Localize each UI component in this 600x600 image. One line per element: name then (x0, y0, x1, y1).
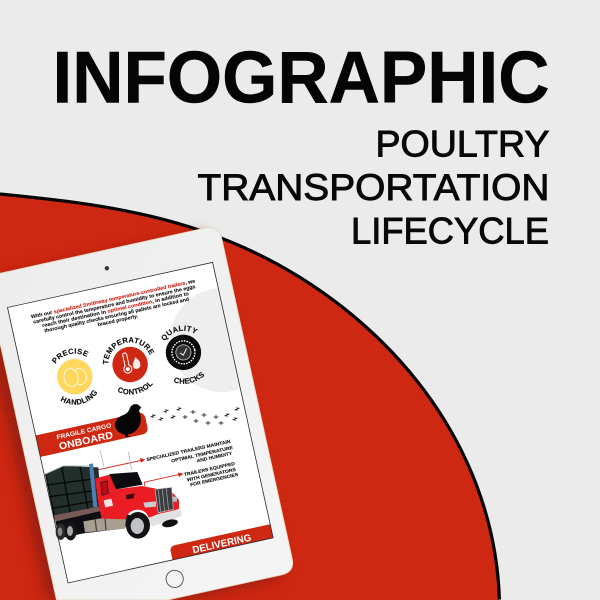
icon: bird tracks (150, 407, 240, 425)
badge: temperature control: CONTROL (118, 382, 153, 395)
banner: fragile cargo onboard: ONBOARD (58, 430, 114, 453)
tablet shadow (0, 234, 283, 600)
badge: quality checks: CHECKS (174, 372, 204, 384)
grey decorative circle (170, 288, 240, 392)
intro paragraph: thorough quality checks ensuring all pallets are locked and (44, 297, 190, 334)
badge: temperature control: TEMPERATURE (102, 337, 154, 364)
intro paragraph: braced properly. (97, 313, 139, 328)
far wheel (161, 518, 179, 529)
antennas (100, 450, 132, 470)
intro paragraph: carefully control the temperature and humidity to ensure the eggs (33, 284, 196, 326)
home button (164, 569, 185, 589)
rear wheels (56, 523, 66, 540)
badge: precise handling: PRECISE (52, 348, 89, 364)
fuel tank (83, 514, 127, 532)
trailer cage (46, 466, 102, 519)
badge: quality checks (162, 326, 204, 384)
intro paragraph: With our specialized Smithway temperature-controlled trailers , we (31, 278, 196, 320)
badge: quality checks: QUALITY (162, 326, 198, 340)
windshield (109, 472, 143, 489)
icon: chick silhouette (115, 404, 141, 437)
tablet (0, 224, 294, 600)
text: specialized trailers: AND HUMIDITY (196, 451, 233, 463)
badge: temperature control (102, 337, 154, 395)
door window (101, 481, 108, 495)
text: trailers equipped: TRAILERS EQUIPPED (183, 461, 236, 477)
text: trailers equipped: FOR EMERGENCIES (190, 472, 239, 487)
arrow: generators (144, 471, 184, 486)
red circle backdrop (0, 194, 499, 600)
hood vent (126, 493, 135, 499)
title: INFOGRAPHIC (52, 36, 550, 119)
logo (104, 499, 113, 507)
front wheel (126, 512, 150, 539)
grille (155, 487, 173, 513)
subtitle: TRANSPORTATION (198, 166, 550, 208)
badge: precise handling: HANDLING (60, 390, 97, 405)
exhaust stacks (89, 463, 97, 507)
trailer deck (54, 507, 102, 521)
banner: delivering: DELIVERING (192, 533, 253, 556)
intro paragraph: reach their destination in optimal condition , in addition to (42, 291, 189, 329)
text: specialized trailers: SPECIALIZED TRAILERS MAINTAIN (146, 439, 232, 462)
camera (104, 266, 110, 271)
banner: fragile cargo onboard (34, 412, 149, 458)
text: trailers equipped: WITH GENERATORS (186, 467, 236, 483)
arrow: trailers temperature (98, 458, 146, 470)
tablet screen (8, 263, 273, 582)
text: specialized trailers: OPTIMAL TEMPERATURE (171, 445, 233, 463)
headlight (143, 501, 156, 508)
banner: delivering: NUTRITIOUS FOOD (196, 542, 252, 561)
tablet body (0, 228, 293, 600)
truck (46, 450, 182, 540)
badge: precise handling (52, 348, 97, 405)
cab body (95, 475, 179, 519)
subtitle: POULTRY (376, 123, 550, 165)
side mirror (173, 497, 177, 502)
bumper (148, 508, 182, 527)
screen border (8, 262, 273, 583)
text: trailers equipped (184, 462, 238, 486)
subtitle (198, 123, 550, 251)
chassis (55, 511, 130, 538)
subtitle: LIFECYCLE (351, 209, 549, 251)
banner: delivering (170, 524, 273, 560)
banner: fragile cargo onboard: FRAGILE CARGO (56, 422, 112, 441)
